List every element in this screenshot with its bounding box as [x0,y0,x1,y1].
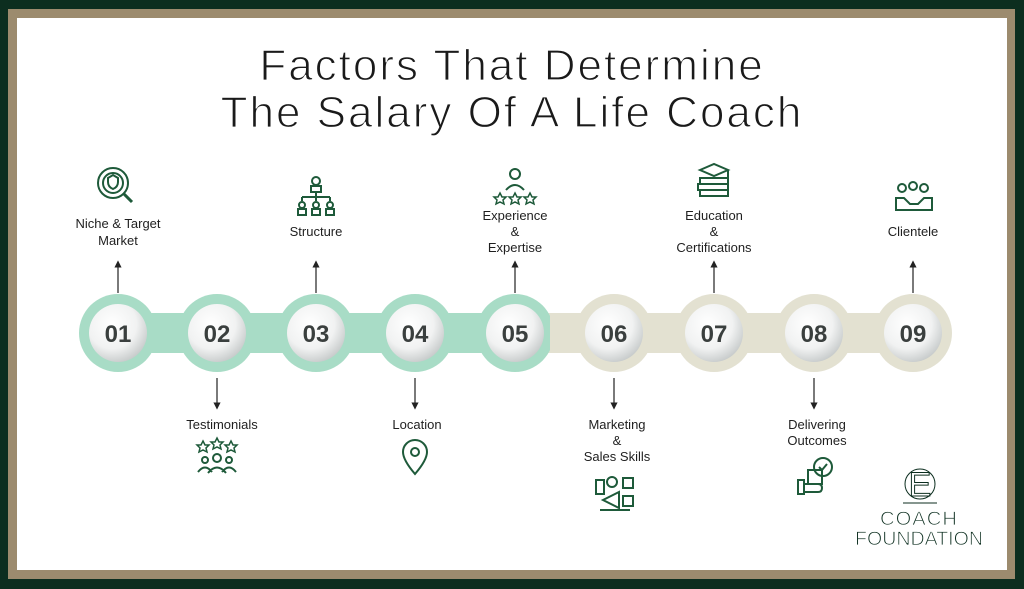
labels: Certifications [676,240,752,255]
title: Factors That Determine [259,41,765,90]
title [221,41,803,137]
number buttons: 08 [801,321,827,348]
labels: Expertise [488,240,542,255]
labels: & [511,224,520,239]
logo: coach foundation [855,466,983,550]
labels: & [710,224,719,239]
number buttons: 09 [900,321,926,348]
icon: delivering outcomes [798,458,832,494]
labels: Delivering [788,417,846,432]
icons [98,164,932,510]
labels: & [613,433,622,448]
labels: Location [392,417,442,432]
logo: coach foundation: FOUNDATION [855,529,983,550]
number buttons: 06 [601,321,627,348]
arrows [118,264,913,406]
logo: coach foundation: COACH [880,509,958,530]
labels: Outcomes [787,433,847,448]
number buttons: 05 [502,321,528,348]
number buttons: 03 [303,321,329,348]
icon: testimonials [197,438,237,473]
labels: Clientele [888,224,938,239]
number buttons: 07 [701,321,727,348]
number buttons [89,304,942,362]
labels: Market [98,233,138,248]
icon: handshake [896,182,932,210]
timeline band [79,294,952,372]
icon: target magnifier [98,168,132,202]
icon: location pin [403,440,427,474]
labels: Niche & Target [75,216,161,231]
labels: Marketing [588,417,646,432]
icon: books cap [698,164,728,196]
labels: Education [685,208,743,223]
title: The Salary Of A Life Coach [221,88,803,137]
labels: Structure [290,224,342,239]
number buttons: 02 [204,321,230,348]
logo: coach foundation: E [909,466,931,504]
icon: org structure [298,177,334,215]
labels: Experience [482,208,548,223]
labels [75,208,938,464]
labels: Testimonials [186,417,258,432]
number buttons: 01 [105,321,131,348]
icon: marketing [596,477,633,510]
labels: Sales Skills [584,449,651,464]
icon: expertise stars [494,169,536,204]
number buttons: 04 [402,321,429,348]
